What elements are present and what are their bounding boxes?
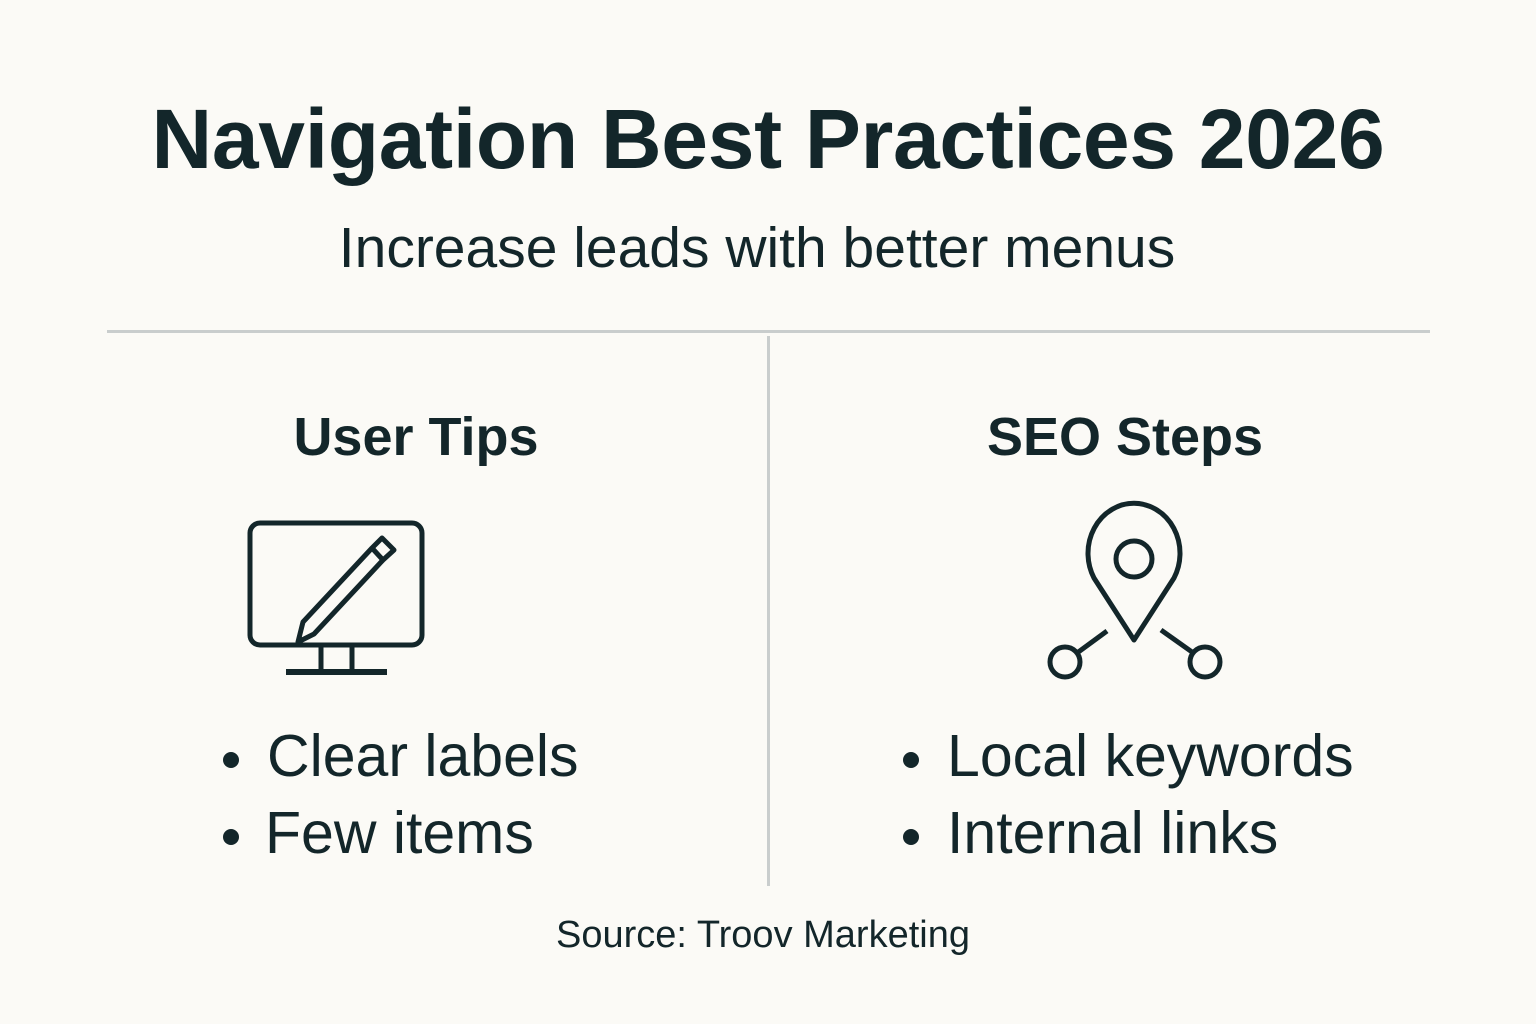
icon: monitor with pencil <box>248 520 424 675</box>
icon: location pin with nodes <box>1048 500 1222 680</box>
bullet list: Clear labels <box>267 723 579 789</box>
bullet list: Local keywords <box>947 723 1354 789</box>
heading: User Tips: User Tips <box>293 407 539 467</box>
bullet list: Few items <box>265 800 534 866</box>
bullet list <box>903 723 1354 866</box>
panel: seo steps <box>903 407 1354 866</box>
title: Navigation Best Practices 2026 <box>152 92 1384 186</box>
heading: SEO Steps: SEO Steps <box>987 407 1263 467</box>
bullet list <box>223 723 579 866</box>
bullet list: Internal links <box>947 800 1278 866</box>
source: Source: Troov Marketing <box>556 914 970 956</box>
divider horizontal <box>107 330 1430 333</box>
subtitle: Increase leads with better menus <box>339 216 1175 280</box>
panel: user tips <box>223 407 579 866</box>
